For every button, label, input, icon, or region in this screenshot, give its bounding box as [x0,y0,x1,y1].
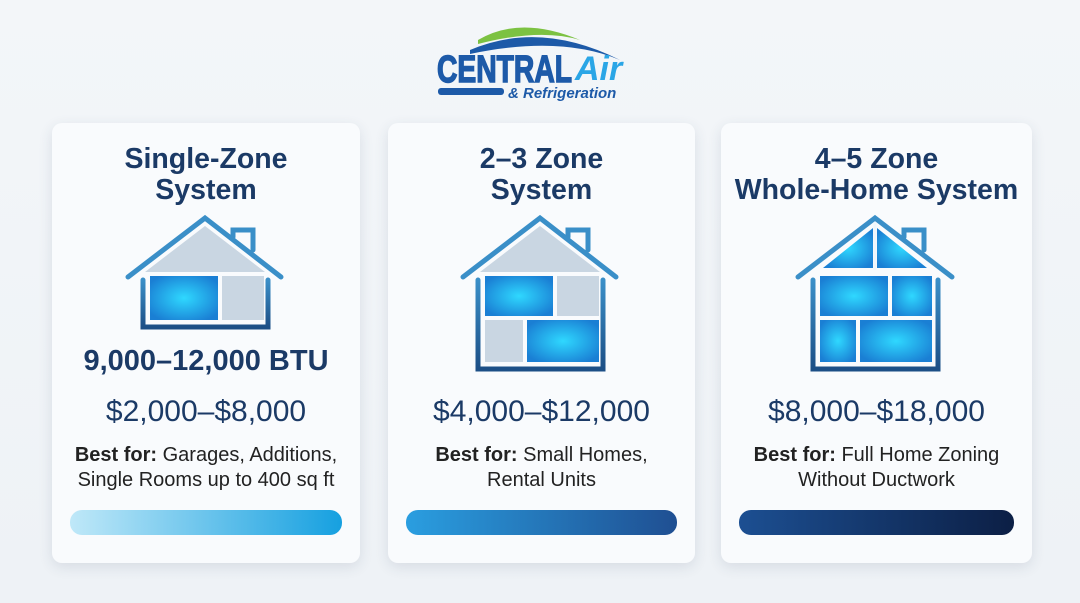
text: price: $4,000–$12,000 [433,395,650,428]
heading: 2–3 Zone [480,143,603,175]
text: best for [75,444,337,491]
text: price: $2,000–$8,000 [106,395,306,428]
text: best for: Rental Units [487,469,596,491]
bar [406,510,677,535]
panel: 2-3 zone [388,123,695,563]
icon: house 2-3 zone [463,218,616,369]
heading: System [155,174,257,206]
heading: Whole-Home System [735,174,1018,206]
text: best for: Without Ductwork [798,469,955,491]
heading [124,143,288,206]
text: price: $8,000–$18,000 [768,395,985,428]
icon: house 4-5 zone [798,218,952,369]
bar [739,510,1014,535]
panel: single-zone [52,123,360,563]
text: best for: Best for: Full Home Zoning [754,444,999,466]
bar [70,510,342,535]
heading [734,143,1018,206]
logo: CENTRAL [437,49,572,91]
heading: Single-Zone [124,143,288,175]
text: best for [754,444,999,491]
text: best for: Best for: Small Homes, [435,444,648,466]
text: best for [435,444,648,491]
text: best for: Single Rooms up to 400 sq ft [78,469,334,491]
heading [480,143,603,206]
logo: Air [574,50,624,88]
text: btu: 9,000–12,000 BTU [83,345,329,377]
heading: System [491,174,592,206]
panel: 4-5 zone [721,123,1032,563]
heading: 4–5 Zone [815,143,938,175]
logo: & Refrigeration [508,85,616,102]
logo [437,28,624,102]
icon: house single zone [128,218,281,327]
text: best for: Best for: Garages, Additions, [75,444,337,466]
